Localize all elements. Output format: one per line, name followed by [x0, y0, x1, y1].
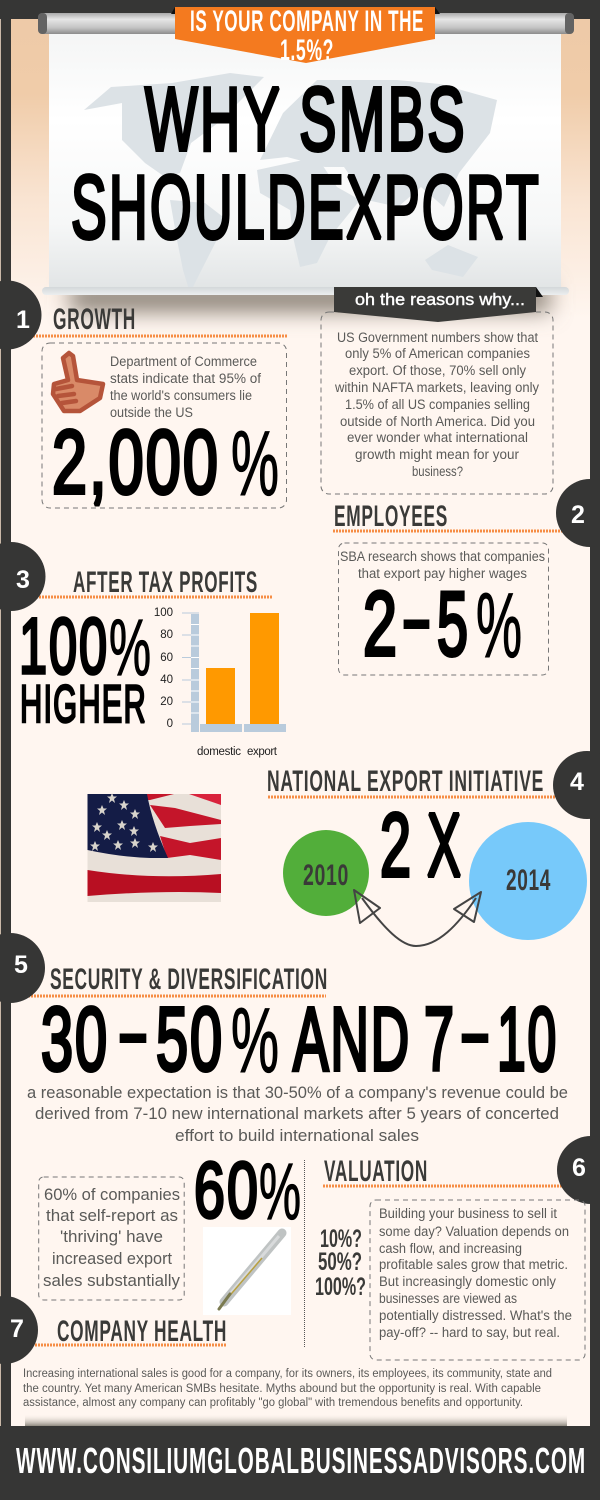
number badge 2	[556, 479, 600, 547]
number badge 7: 7	[10, 1315, 24, 1343]
number badge 6: 6	[572, 1154, 586, 1182]
growth text: stats indicate that 95% of	[110, 371, 261, 386]
stat: 100% higher: %	[109, 603, 151, 692]
ribbon: oh the reasons why: oh the reasons why...	[355, 290, 525, 309]
reasons text: ever wonder what international	[347, 430, 528, 445]
number badge 3	[0, 542, 46, 611]
circle: 2014: 2014	[506, 864, 551, 897]
reasons text: US Government numbers show that	[337, 330, 538, 345]
stat: 100% higher: 100	[19, 601, 109, 690]
stat: 2-5%: 2	[363, 574, 397, 675]
number badge 4	[553, 751, 600, 819]
panel: 5 security and diversification	[0, 933, 568, 1145]
shadow under the paper	[70, 284, 550, 312]
company health text: increased export	[52, 1250, 172, 1268]
employees text: that export pay higher wages	[358, 566, 527, 581]
panel: 7 company health	[0, 1145, 301, 1364]
reasons text: business?	[412, 464, 463, 479]
title	[71, 70, 541, 258]
circle: 2010	[283, 830, 369, 916]
bar chart: 40	[160, 674, 173, 686]
growth text: the world's consumers lie	[110, 388, 252, 403]
stat: 30-50% and 7-10: –	[460, 978, 490, 1085]
number badge 1	[0, 280, 42, 350]
stat: 30-50% and 7-10: 50	[156, 990, 224, 1090]
icon: thumbs up	[53, 353, 103, 411]
reasons text: export. Of those, 70% sell only	[349, 363, 526, 378]
stat: 30-50% and 7-10	[41, 978, 558, 1092]
number badge 6	[557, 1136, 600, 1204]
closing text: assistance, almost any company can profitably "go global" with tremendous benefits and opportunity.	[23, 1397, 523, 1409]
paper screen with world map	[49, 30, 561, 293]
security text	[27, 1084, 568, 1145]
stat: 2-5%: –	[402, 564, 431, 671]
reasons text: outside of North America. Did you	[340, 414, 535, 429]
number badge 7	[0, 1296, 38, 1364]
reasons text: 1.5% of all US companies selling	[345, 397, 530, 412]
security text: a reasonable expectation is that 30-50% of a company's revenue could be	[27, 1084, 568, 1102]
banner text: IS YOUR COMPANY IN THE	[190, 5, 424, 38]
stat: 2X: 2	[380, 796, 411, 896]
stat: 2X	[380, 796, 461, 896]
heading: company health: COMPANY HEALTH	[57, 1315, 227, 1348]
icon: thermometer	[203, 1227, 291, 1315]
world map	[84, 73, 497, 293]
icon: american flag	[88, 793, 221, 902]
closing text: the country. Yet many American SMBs hesitate. Myths abound but the opportunity is real. With capable	[23, 1383, 541, 1395]
arrow: two-way curve	[354, 890, 481, 946]
bar chart: export	[247, 746, 278, 758]
bar chart: 60	[160, 652, 173, 664]
circle: 2010: 2010	[303, 859, 349, 892]
number badge 5: 5	[14, 951, 28, 979]
valuation text: potentially distressed. What's the	[379, 1308, 572, 1323]
bar chart: 100	[154, 607, 173, 619]
stat: 2-5%: %	[476, 575, 522, 677]
valuation text	[379, 1206, 572, 1340]
orange banner	[171, 5, 440, 67]
stat: 2-5%: 5	[437, 574, 468, 675]
bar chart: 20	[160, 696, 173, 708]
valuation text: businesses are viewed as	[379, 1291, 517, 1306]
number badge 4: 4	[570, 768, 584, 796]
circle: 2014	[469, 822, 587, 940]
stat: 60%: 60	[194, 1145, 260, 1234]
valuation percentages: 10%?	[320, 1225, 362, 1253]
banner text: 1.5%?	[280, 34, 334, 67]
company health text: 'thriving' have	[60, 1228, 163, 1246]
valuation text: some day? Valuation depends on	[379, 1224, 569, 1239]
stat: 2,000%: %	[231, 413, 279, 515]
stat: 30-50% and 7-10: 7	[424, 990, 454, 1090]
bottom rod of paper	[42, 287, 569, 295]
valuation text: Building your business to sell it	[379, 1206, 557, 1221]
valuation text: pay-off? -- hard to say, but real.	[379, 1325, 560, 1340]
stat: 100% higher	[19, 601, 151, 734]
reasons text: growth might mean for your	[355, 447, 519, 462]
panel: 2 employees	[333, 479, 600, 677]
stat: 30-50% and 7-10: AND	[293, 990, 411, 1090]
divider	[304, 1160, 306, 1347]
valuation percentages	[315, 1225, 366, 1301]
security text: derived from 7-10 new international markets after 5 years of concerted	[35, 1105, 559, 1123]
heading: security and diversification: SECURITY & DIVERSIFICATION	[50, 963, 328, 996]
roller bar	[38, 13, 574, 34]
reasons text: within NAFTA markets, leaving only	[334, 380, 539, 395]
number badge 3: 3	[16, 566, 30, 594]
bar chart	[154, 607, 286, 758]
closing text	[23, 1368, 552, 1409]
closing text: Increasing international sales is good for a company, for its owners, its employees, its community, state and	[23, 1368, 552, 1380]
number badge 2: 2	[571, 501, 585, 529]
number badge 1: 1	[16, 306, 30, 334]
heading: after tax profits: AFTER TAX PROFITS	[73, 566, 258, 599]
reasons text: only 5% of American companies	[345, 346, 530, 361]
footer shadow	[25, 1414, 567, 1426]
valuation text: profitable sales grow that metric.	[379, 1257, 568, 1272]
growth text: Department of Commerce	[110, 354, 257, 369]
valuation text: But increasingly domestic only	[379, 1274, 556, 1289]
employees text: SBA research shows that companies	[340, 549, 545, 564]
bar chart: domestic	[197, 746, 241, 758]
banner text	[190, 5, 424, 67]
company health text	[43, 1186, 181, 1290]
panel: 4 national export initiative	[267, 751, 600, 946]
panel: 3 after tax profits	[0, 542, 286, 758]
heading: employees: EMPLOYEES	[334, 500, 448, 533]
bar chart: 0	[167, 718, 173, 730]
stat: 60%: %	[259, 1147, 301, 1236]
panel: reasons	[321, 287, 553, 494]
stat: 30-50% and 7-10: 30	[41, 990, 109, 1090]
stat: 2X: X	[427, 796, 461, 896]
valuation percentages: 50%?	[318, 1248, 362, 1276]
company health text: sales substantially	[43, 1272, 181, 1290]
bar chart: 80	[160, 629, 173, 641]
number badge 5	[0, 933, 45, 1003]
panel: 1 growth	[0, 280, 287, 515]
stat: 2-5%	[363, 564, 522, 677]
employees text	[340, 549, 545, 581]
stat: 30-50% and 7-10: 10	[497, 990, 558, 1090]
company health text: that self-report as	[46, 1207, 178, 1225]
growth text	[110, 354, 261, 420]
ribbon: oh the reasons why	[334, 287, 543, 322]
growth text: outside the US	[110, 405, 193, 420]
valuation text: cash flow, and increasing	[379, 1241, 522, 1256]
stat: 30-50% and 7-10: –	[118, 978, 148, 1085]
stat: 30-50% and 7-10: %	[231, 990, 279, 1092]
panel: 6 valuation	[315, 1136, 600, 1360]
company health text: 60% of companies	[44, 1186, 180, 1204]
security text: effort to build international sales	[175, 1127, 419, 1145]
stat: 2,000%: 2,000	[52, 413, 220, 513]
stat: 100% higher: HIGHER	[20, 675, 147, 734]
reasons text	[334, 330, 539, 479]
heading: growth: GROWTH	[53, 303, 136, 336]
valuation percentages: 100%?	[315, 1273, 366, 1301]
heading: valuation: VALUATION	[324, 1155, 428, 1188]
